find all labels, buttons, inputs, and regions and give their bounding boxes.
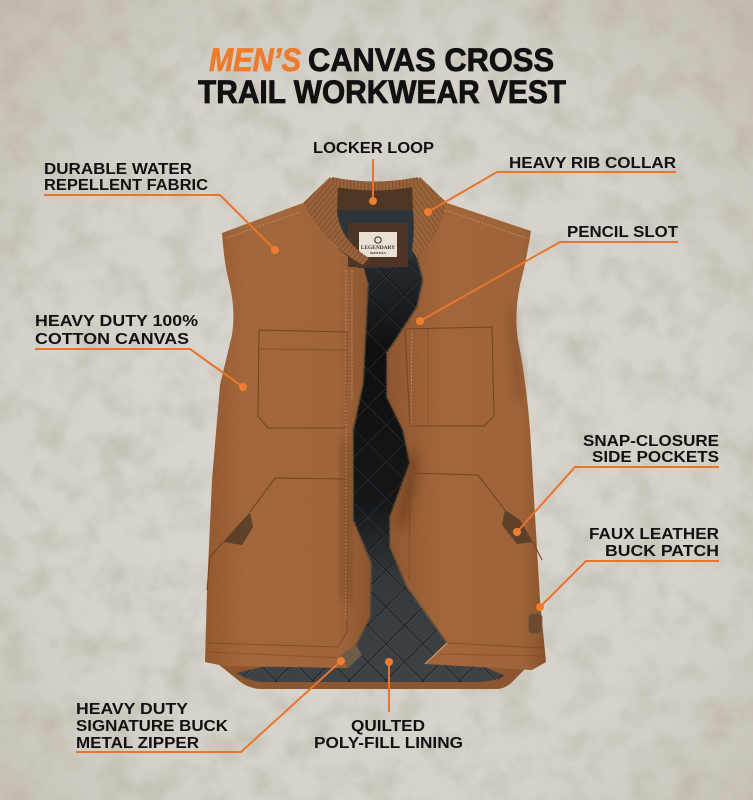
left faux leather patch xyxy=(223,512,253,545)
callout: locker loop xyxy=(313,140,434,205)
hang tag patch and label: WHITETAILS xyxy=(370,251,386,255)
title: MEN’S xyxy=(209,42,302,78)
hang tag patch and label: LEGENDARY xyxy=(361,245,395,251)
callout: durable water repellent fabric: REPELLENT FABRIC xyxy=(44,177,208,194)
title: CANVAS CROSS xyxy=(308,42,554,78)
callout: heavy rib collar: HEAVY RIB COLLAR xyxy=(509,155,676,172)
right chest pocket xyxy=(405,327,494,426)
callout: metal zipper: SIGNATURE BUCK xyxy=(76,718,228,735)
fabric shading xyxy=(342,300,522,600)
left front panel xyxy=(205,203,371,668)
right front panel xyxy=(387,203,546,670)
quilted lining xyxy=(236,208,505,682)
title: TRAIL WORKWEAR VEST xyxy=(198,74,566,110)
callout: pencil slot xyxy=(416,224,678,325)
vest illustration xyxy=(205,177,546,689)
rib collar xyxy=(303,177,447,265)
callout: metal zipper: METAL ZIPPER xyxy=(76,735,199,752)
callout: metal zipper: HEAVY DUTY xyxy=(76,701,188,718)
callout: faux leather buck patch: FAUX LEATHER xyxy=(589,526,719,543)
callout: heavy rib collar xyxy=(424,155,676,216)
callout: faux leather buck patch: BUCK PATCH xyxy=(605,543,719,560)
right faux leather patch xyxy=(502,510,533,544)
callout: snap-closure side pockets: SIDE POCKETS xyxy=(592,449,719,466)
callout: durable water repellent fabric xyxy=(44,161,279,254)
callout: quilted lining: QUILTED xyxy=(351,718,425,735)
callout: durable water repellent fabric: DURABLE WATER xyxy=(44,161,192,178)
neck interior xyxy=(332,178,418,268)
right lower pocket xyxy=(409,473,545,656)
callout: metal zipper xyxy=(76,657,345,752)
callout: faux leather buck patch xyxy=(536,526,719,611)
buck patch xyxy=(528,613,542,634)
callout: quilted lining: POLY-FILL LINING xyxy=(314,735,463,752)
left chest pocket xyxy=(258,330,347,428)
title xyxy=(198,42,566,110)
zipper tracks xyxy=(347,257,447,664)
callout: locker loop: LOCKER LOOP xyxy=(313,140,434,157)
vest back hem xyxy=(218,664,530,689)
hang tag patch and label xyxy=(348,223,408,267)
left lower pocket xyxy=(207,478,347,658)
callout: pencil slot: PENCIL SLOT xyxy=(567,224,678,241)
callout: snap-closure side pockets xyxy=(513,433,719,536)
shoulder stitching xyxy=(226,210,526,620)
callout: snap-closure side pockets: SNAP-CLOSURE xyxy=(583,433,719,450)
callout: heavy duty cotton canvas xyxy=(35,313,247,391)
zipper pull xyxy=(340,645,362,668)
callout: heavy duty cotton canvas: HEAVY DUTY 100% xyxy=(35,313,198,330)
callout: heavy duty cotton canvas: COTTON CANVAS xyxy=(35,331,189,348)
callout: quilted lining xyxy=(314,658,463,752)
